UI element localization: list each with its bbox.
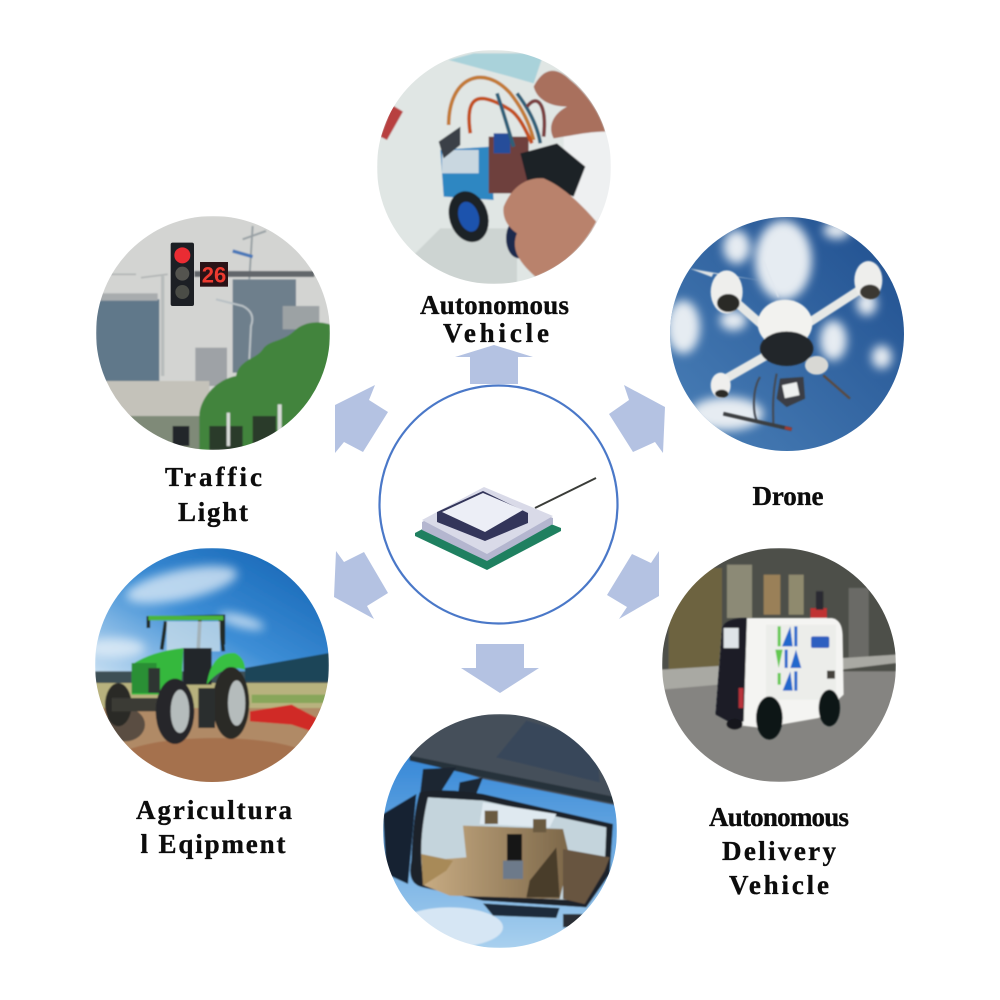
icon: antenna cable (535, 478, 596, 508)
label: agricultural equipment: Agricultura (136, 795, 292, 825)
arrow: to drone (609, 385, 665, 453)
label: autonomous vehicle: Vehicle (443, 318, 549, 348)
label: drone: Drone (752, 481, 824, 511)
photo: drone (667, 217, 904, 451)
label: autonomous vehicle: Autonomous (420, 290, 569, 320)
label: autonomous delivery vehicle: Vehicle (729, 870, 829, 900)
photo: traffic light (96, 216, 330, 450)
label: agricultural equipment (136, 795, 292, 859)
label: autonomous vehicle (420, 290, 569, 348)
label: traffic light: Traffic (165, 462, 262, 492)
photo: traffic light: 26 (202, 262, 226, 287)
icon: ceramic patch (437, 491, 528, 541)
photo: delivery vehicle (662, 548, 896, 782)
icon: green board (415, 497, 561, 570)
arrow: to delivery vehicle (607, 551, 659, 619)
photo: autonomous vehicle kit (377, 50, 611, 284)
label: traffic light (165, 462, 262, 527)
arrow: to agricultural equipment (334, 551, 388, 619)
photo: tractor (85, 548, 329, 785)
label: traffic light: Light (178, 497, 248, 527)
arrow: down to mirror (461, 644, 539, 693)
center circle: antenna module (380, 386, 618, 624)
label: autonomous delivery vehicle: Autonomous (709, 802, 849, 832)
arrow: up to autonomous vehicle (455, 345, 533, 384)
label: autonomous delivery vehicle: Delivery (722, 836, 836, 866)
label: agricultural equipment: l Eqipment (140, 829, 286, 859)
icon: base plate (422, 489, 553, 561)
photo: rear view mirror (383, 714, 617, 948)
label: autonomous delivery vehicle (709, 802, 849, 900)
arrow: to traffic light (335, 385, 388, 453)
